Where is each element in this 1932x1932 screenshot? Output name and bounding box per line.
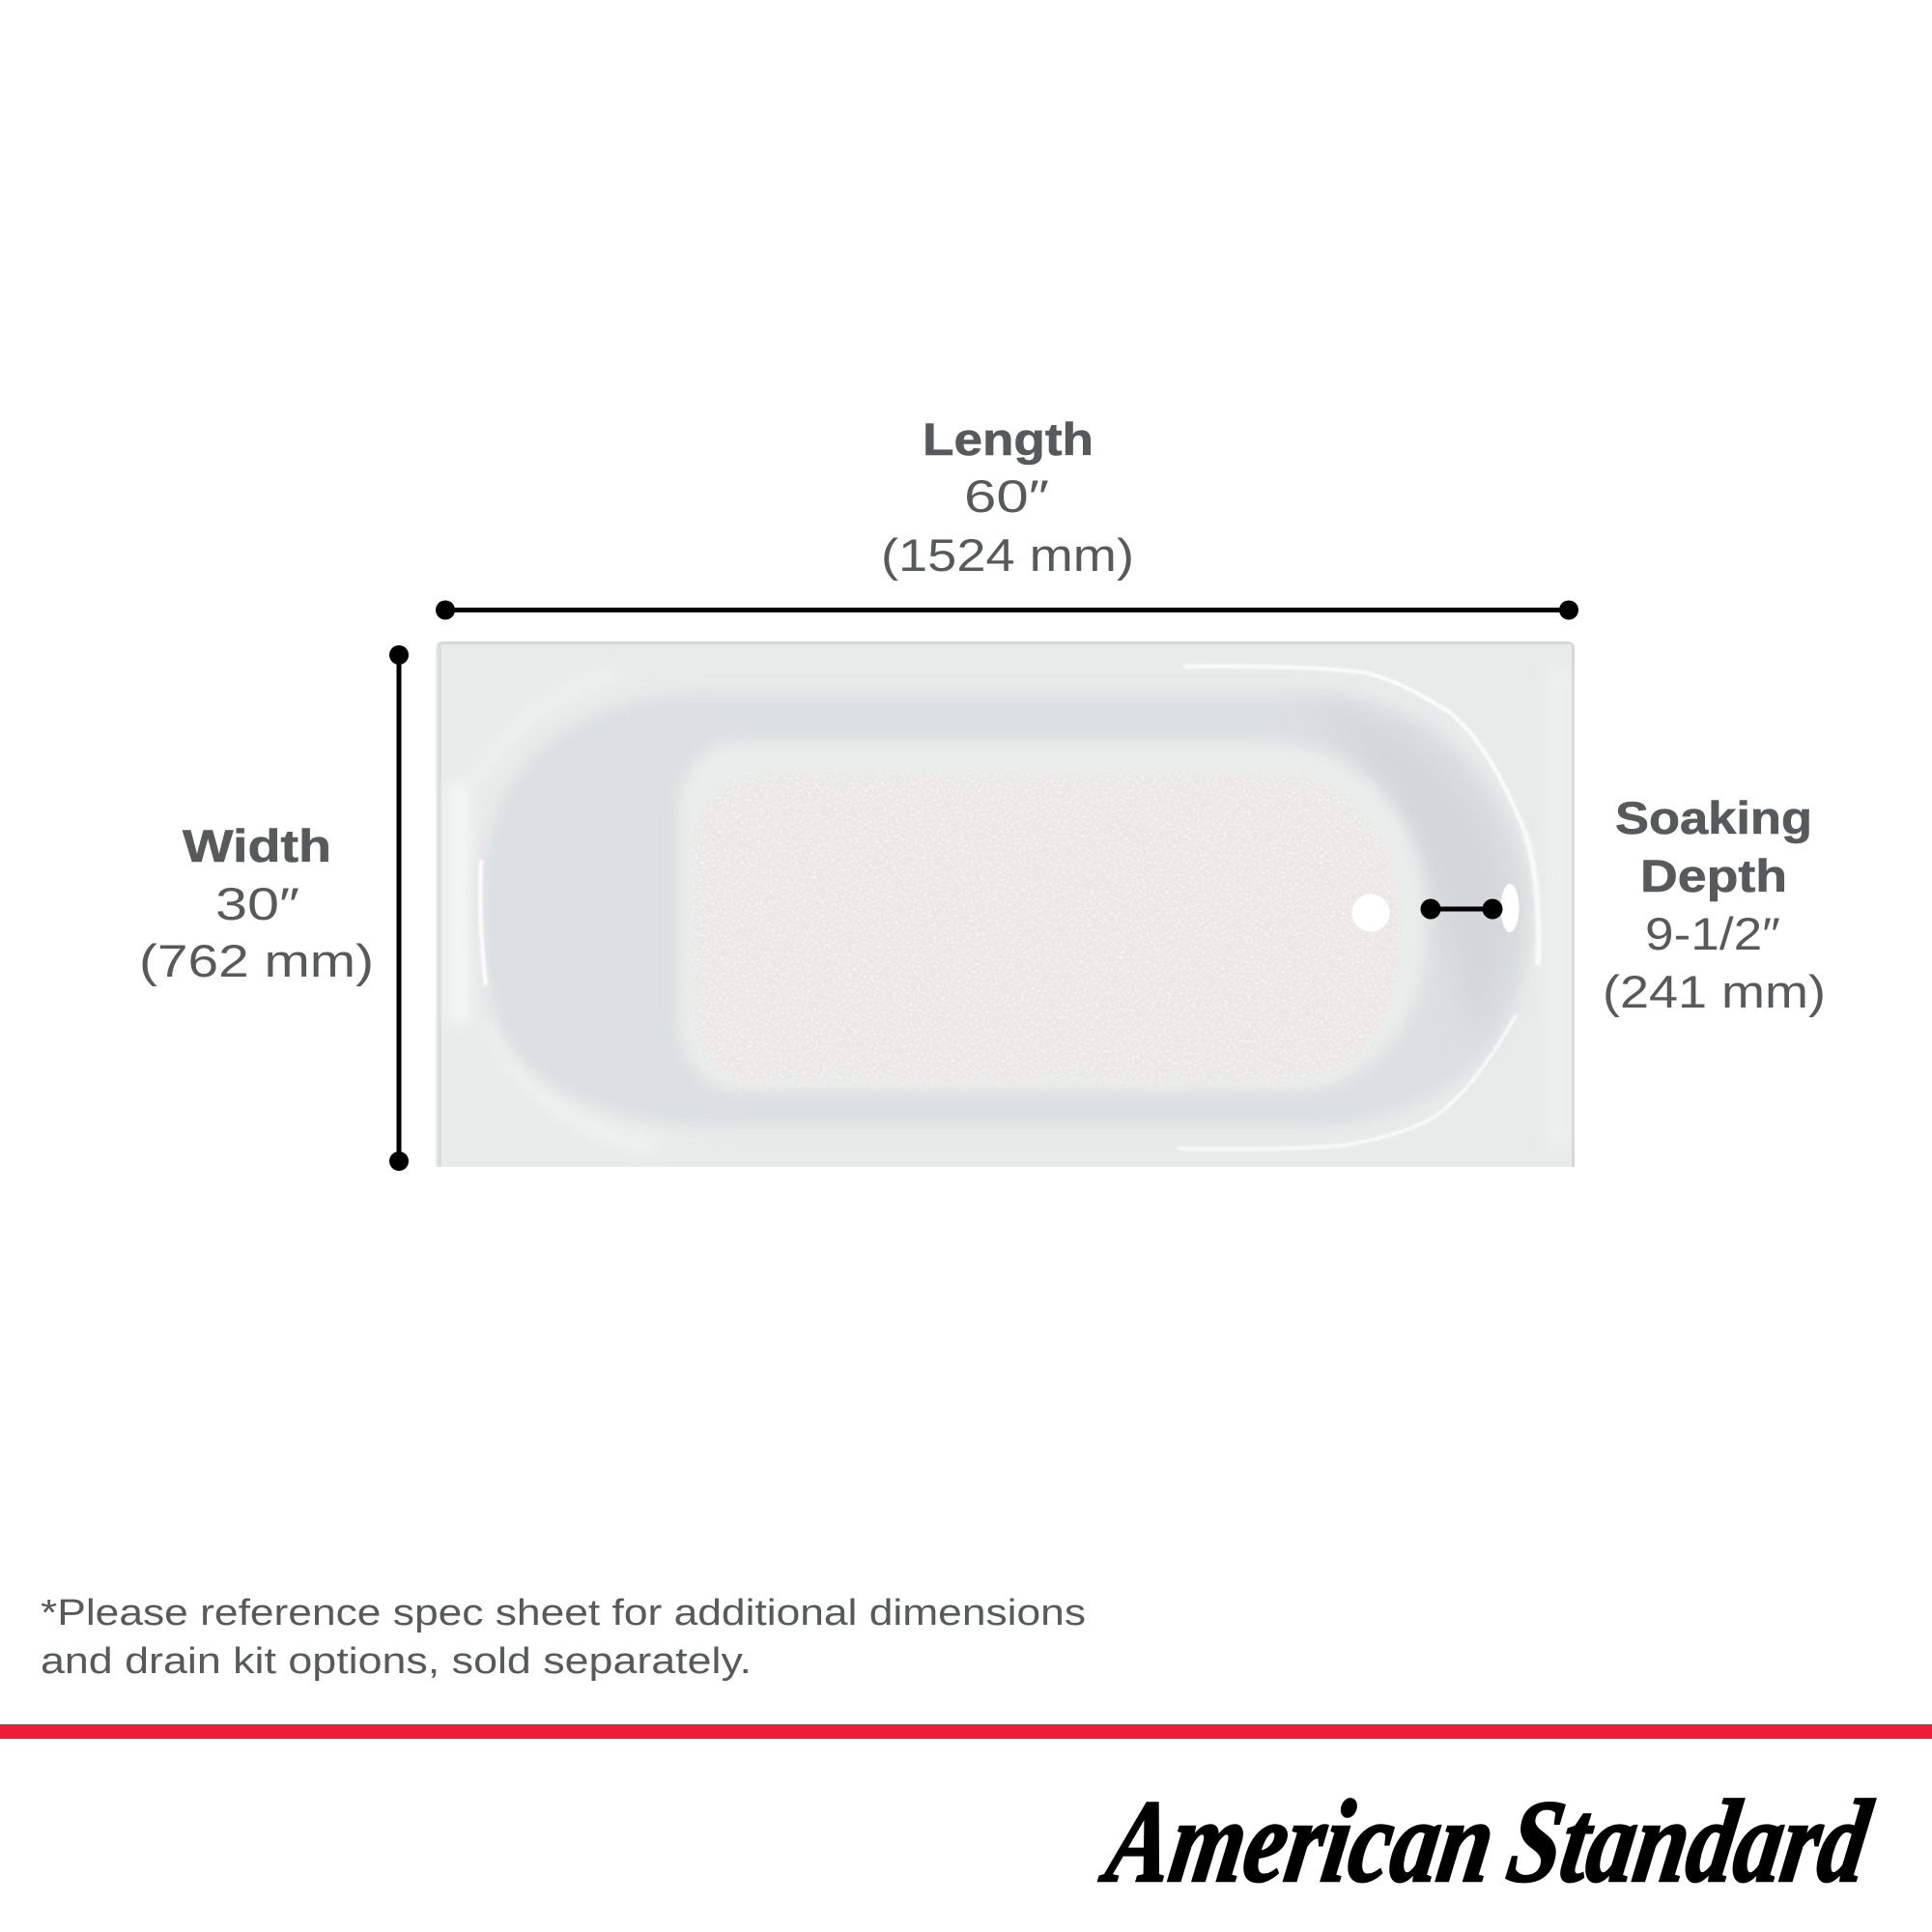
logo: American Standard — [1094, 1776, 1879, 1907]
icon: overflow hole — [1501, 884, 1519, 932]
length dimension line — [436, 601, 1578, 620]
label: length: 60″ — [964, 470, 1049, 522]
label: soaking depth: Soaking — [1615, 792, 1812, 843]
label: soaking depth: (241 mm) — [1603, 966, 1826, 1017]
label: width: 30″ — [215, 878, 299, 929]
footnote: and drain kit options, sold separately. — [41, 1641, 752, 1682]
label: width: (762 mm) — [139, 935, 374, 986]
width dimension line — [389, 645, 409, 1171]
rim highlights — [1183, 667, 1524, 831]
label: soaking depth: Depth — [1640, 850, 1787, 901]
label: soaking depth: 9-1/2″ — [1645, 908, 1780, 959]
red divider bar — [0, 1724, 1932, 1739]
label: length — [881, 413, 1134, 581]
logo: American Standard: American — [1094, 1776, 1503, 1907]
label: width: Width — [183, 820, 331, 871]
bathtub photo — [436, 641, 1575, 1168]
label: length: Length — [923, 413, 1094, 465]
soaking depth dimension line — [1420, 898, 1503, 920]
label: length: (1524 mm) — [881, 529, 1134, 581]
footnote — [41, 1593, 1086, 1682]
icon: drain hole — [1352, 895, 1389, 931]
label: width — [139, 820, 374, 986]
label: soaking depth — [1603, 792, 1826, 1017]
footnote: *Please reference spec sheet for additional dimensions — [41, 1593, 1086, 1634]
basin wall — [481, 695, 1531, 1126]
floor ledge — [678, 741, 1426, 1092]
speckled floor — [692, 773, 1400, 1082]
